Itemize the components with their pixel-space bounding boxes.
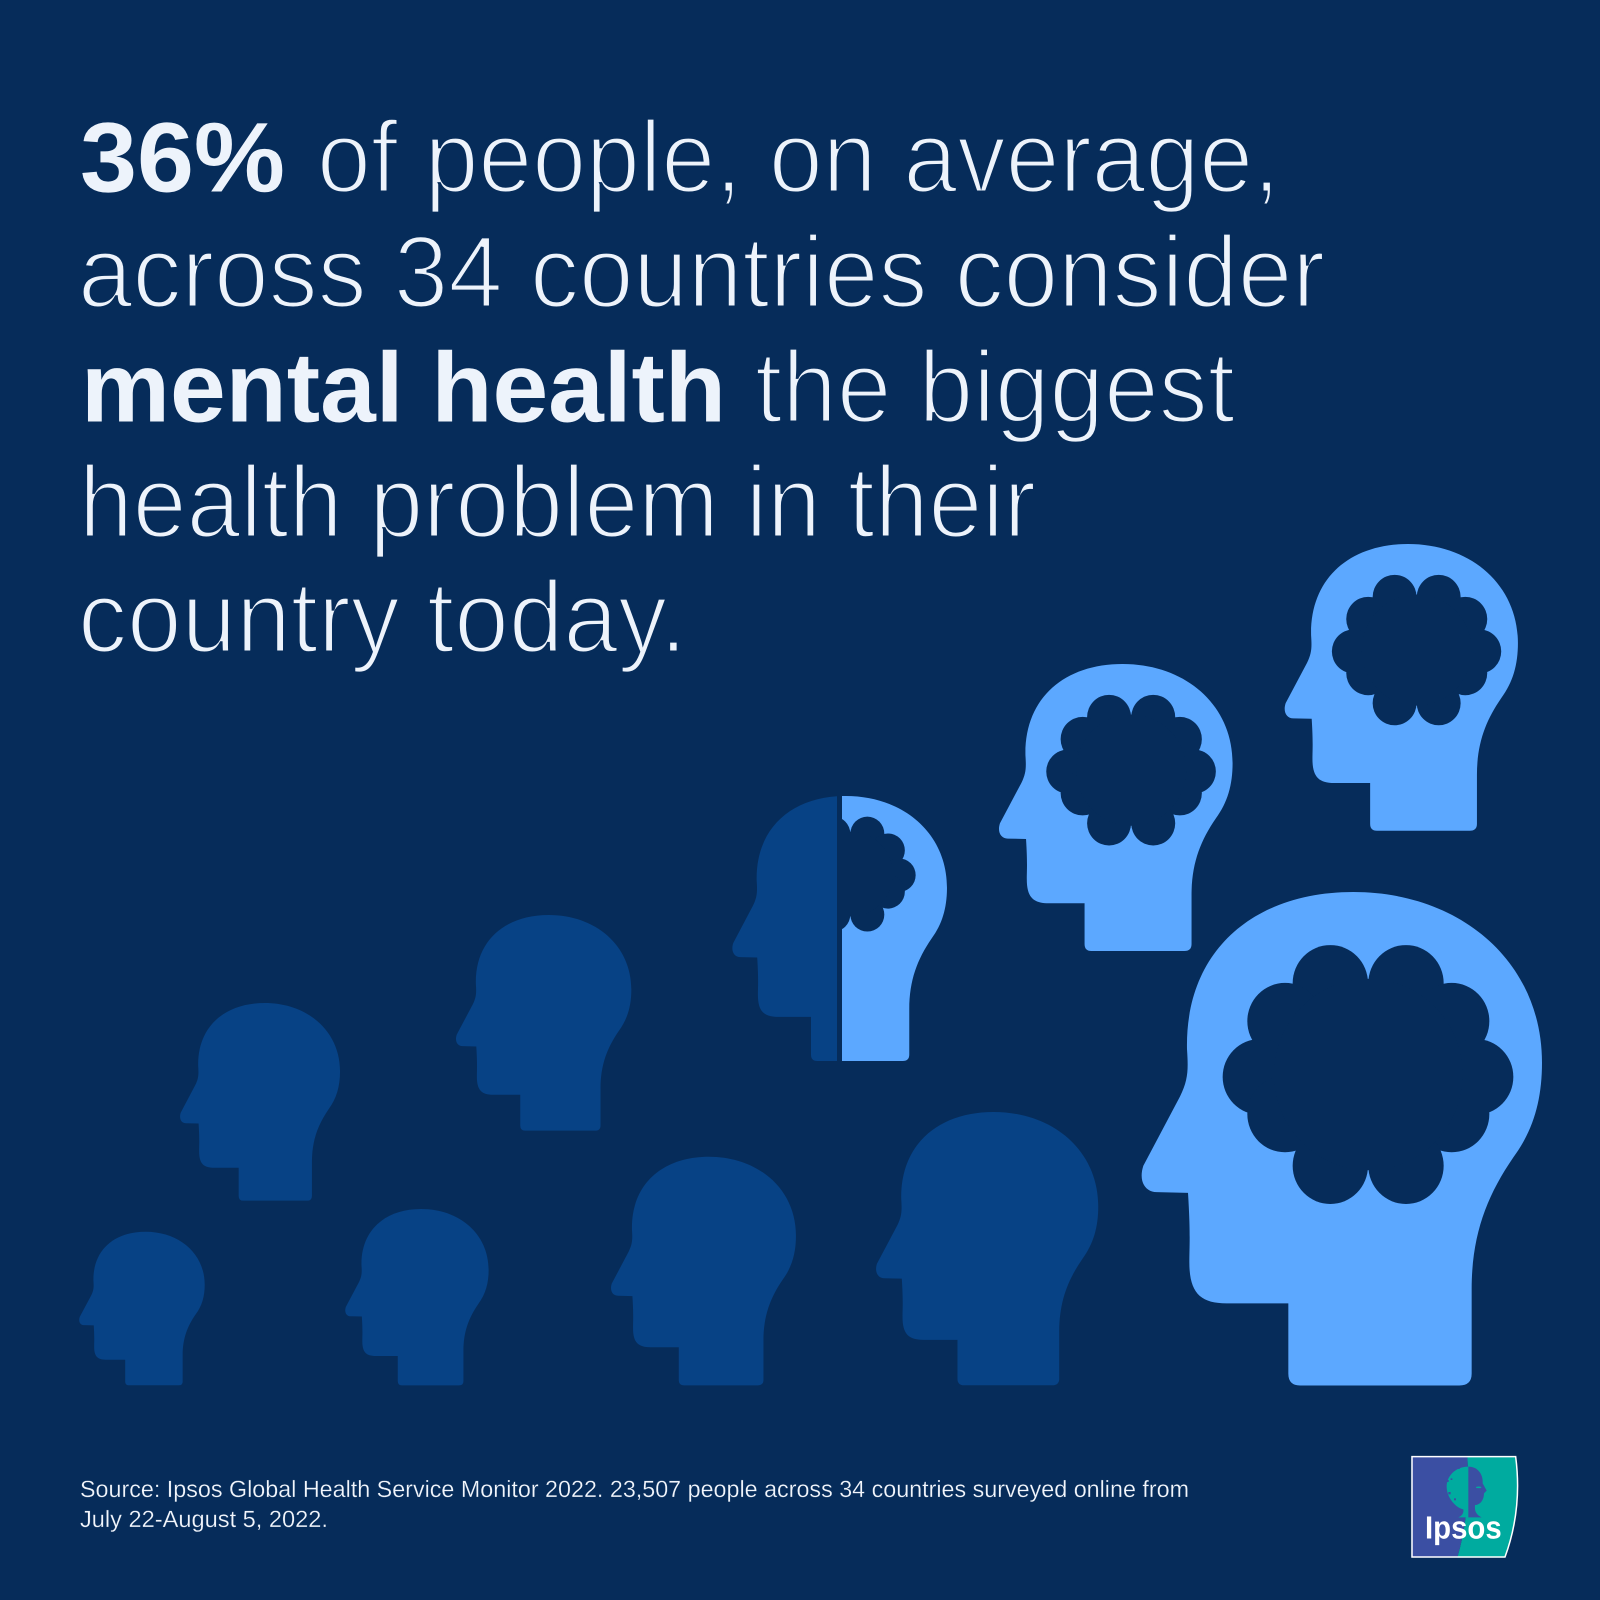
logo: Ipsos bbox=[1411, 1456, 1518, 1558]
title: mental health bbox=[81, 332, 726, 443]
title: of people, on average, bbox=[317, 100, 1280, 214]
source note: Source: Ipsos Global Health Service Monitor 2022. 23,507 people across 34 countries surveyed online from bbox=[80, 1476, 1189, 1502]
icon: dark head upper middle bbox=[456, 915, 631, 1131]
icon: light head with brain middle bbox=[999, 664, 1233, 951]
title: across 34 countries consider bbox=[78, 215, 1325, 329]
title: health problem in their bbox=[79, 445, 1036, 559]
logo: Ipsos: Ipsos bbox=[1425, 1510, 1502, 1545]
illustration: heads bbox=[79, 544, 1542, 1385]
icon: dark head bottom fourth bbox=[876, 1112, 1098, 1385]
title: the biggest bbox=[755, 330, 1235, 444]
icon: dark head bottom third bbox=[611, 1157, 796, 1385]
source note bbox=[80, 1476, 1189, 1532]
icon: small dark head bbox=[79, 1232, 205, 1385]
source note: July 22-August 5, 2022. bbox=[80, 1506, 328, 1532]
title: 36% bbox=[80, 102, 285, 213]
icon: light head with brain top right bbox=[1285, 544, 1518, 831]
icon: large light head with brain bbox=[1142, 892, 1542, 1385]
icon: half dark half light head with brain bbox=[732, 796, 947, 1061]
title bbox=[78, 100, 1325, 674]
title: country today. bbox=[78, 560, 687, 674]
icon: dark head upper left bbox=[180, 1003, 340, 1201]
icon: dark head bottom second bbox=[345, 1209, 489, 1385]
